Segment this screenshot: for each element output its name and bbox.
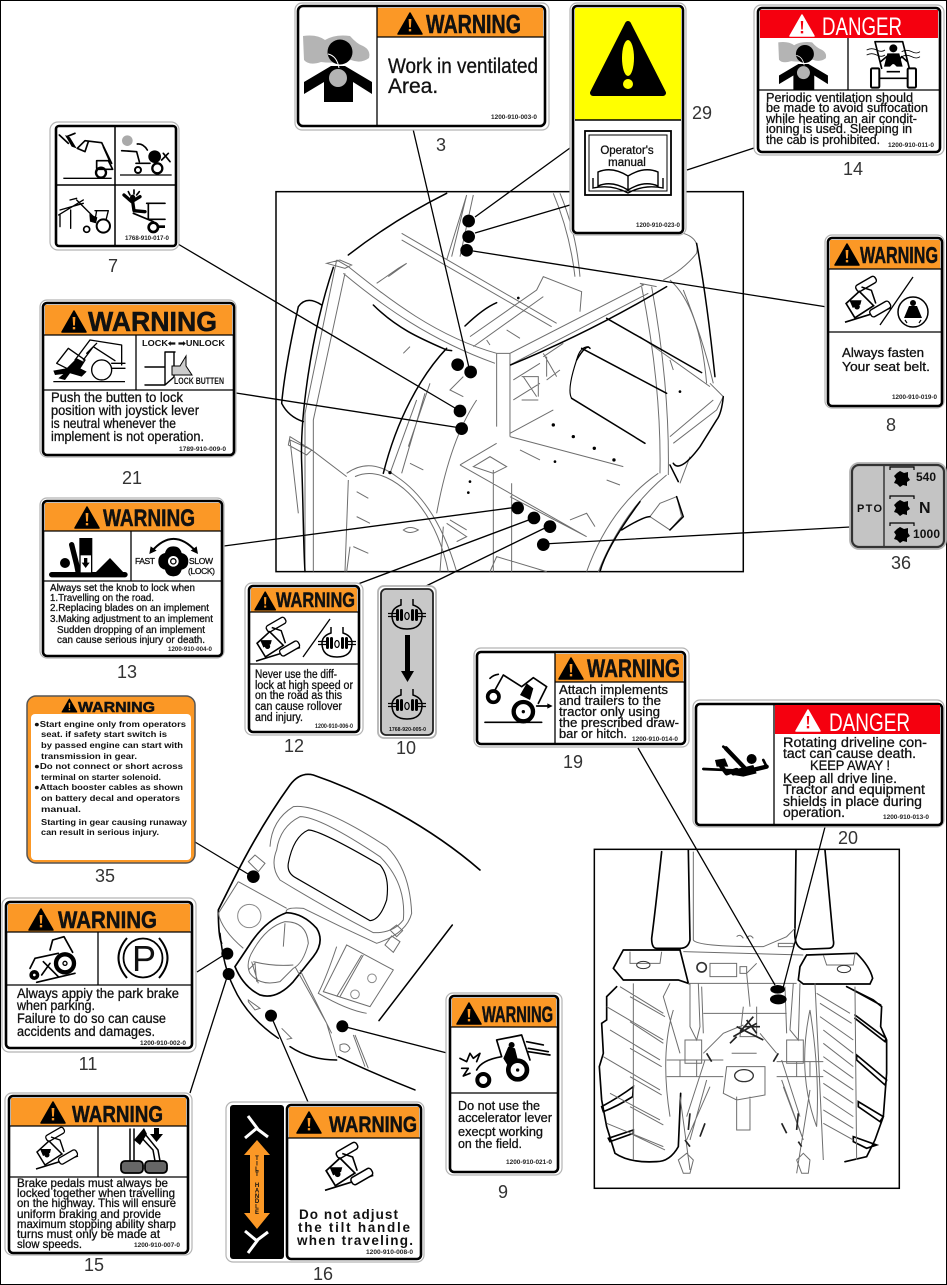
decal 9: accelerator lever	[446, 993, 562, 1175]
part number: 1789-910-009-0	[179, 446, 226, 453]
label 16: 16	[313, 1264, 333, 1284]
message text: the cab is prohibited.	[766, 132, 880, 147]
message text: can result in serious injury.	[41, 827, 159, 837]
decal 13: lock knob	[40, 498, 224, 658]
speed labels	[135, 556, 215, 576]
message text: Starting in gear causing runaway	[41, 817, 187, 827]
icon: tractor tipping	[485, 674, 553, 722]
message text: slow speeds.	[17, 1237, 82, 1251]
icon: person on implement	[124, 190, 165, 232]
tilt handle strip: TILT HANDLE	[254, 1156, 260, 1215]
message text: is neutral whenever the	[51, 415, 176, 431]
message text: Brake pedals must always be	[17, 1176, 168, 1190]
message text: while heating an air condit-	[765, 111, 917, 126]
warning header: WARNING	[482, 1002, 553, 1027]
decal 21: joystick lock	[40, 300, 236, 457]
message text: ioning is used. Sleeping in	[766, 121, 912, 136]
part number: 1200-910-013-0	[883, 814, 929, 821]
icon: tilted tractor	[325, 1141, 374, 1190]
label 3: 3	[436, 135, 446, 155]
message text: 3.Making adjustment to an implement	[50, 613, 213, 625]
message text: 2.Replacing blades on an implement	[50, 602, 209, 614]
icon: rollover	[845, 275, 892, 322]
label 12: 12	[284, 736, 304, 756]
decal 14: danger ventilation	[754, 5, 944, 155]
message text: Tractor and equipment	[783, 782, 925, 797]
message text: Sudden dropping of an implement	[57, 624, 205, 636]
message text: uniform braking and provide	[17, 1207, 161, 1221]
message text: ●Start engine only from operators	[34, 719, 186, 729]
message text: bar or hitch.	[559, 726, 627, 741]
positions: 1000	[913, 527, 940, 541]
part number: 1200-910-007-0	[134, 1242, 180, 1249]
message text: lock at high speed or	[255, 680, 353, 692]
message text: Never use the diff-	[255, 669, 337, 681]
decal 10: diff-lock direction	[378, 586, 436, 738]
message text: on battery decal and operators	[41, 793, 180, 803]
part number: 1200-910-011-0	[888, 142, 934, 149]
decal 8: fasten seat belt	[825, 235, 944, 408]
positions: N	[919, 500, 931, 517]
leader lines	[178, 129, 850, 1102]
icon: no diff-lock	[303, 619, 356, 657]
label 14: 14	[843, 159, 863, 179]
warning header: WARNING	[426, 9, 521, 39]
warning header	[251, 588, 357, 612]
decal 36: PTO selector	[850, 463, 946, 549]
message text: Do not use the	[458, 1098, 540, 1113]
icon: power line contact	[59, 198, 110, 233]
message text: and trailers to the	[559, 693, 661, 708]
warning header	[8, 904, 190, 934]
icon: ventilation	[303, 36, 372, 102]
icon: entangled person	[703, 747, 767, 777]
icon: lock button	[142, 339, 225, 386]
message text: when traveling.	[296, 1233, 413, 1248]
danger header	[760, 10, 938, 41]
part number: 1768-910-017-0	[125, 235, 169, 242]
message text: operation.	[783, 805, 845, 820]
PTO label: PTO	[857, 503, 882, 515]
label 13: 13	[117, 662, 137, 682]
message text: ●Do not connect or short across	[34, 761, 183, 771]
speed labels: (LOCK)	[188, 566, 215, 576]
icon: manual book: Operator's	[600, 145, 654, 157]
message text: Failure to do so can cause	[17, 1011, 166, 1026]
message text: transmission in gear.	[41, 751, 137, 761]
message text: Area.	[388, 75, 438, 98]
speed labels: FAST	[135, 556, 155, 566]
speed labels: SLOW	[189, 556, 213, 566]
part number: 1200-910-006-0	[315, 723, 353, 730]
message text: maximum stopping ability sharp	[17, 1217, 176, 1231]
message text: on the field.	[458, 1136, 522, 1151]
warning header	[830, 240, 940, 269]
icon: diff engaged	[388, 599, 426, 629]
message text: 1.Travelling on the road.	[50, 592, 154, 604]
message text: turns must only be made at	[17, 1227, 161, 1241]
message text: implement is not operation.	[51, 428, 204, 444]
warning header	[377, 8, 543, 39]
decal 11: park brake	[2, 898, 196, 1052]
warning header: WARNING	[58, 907, 157, 934]
label 29: 29	[692, 103, 712, 123]
label 15: 15	[84, 1255, 104, 1275]
warning header: WARNING	[72, 1101, 163, 1127]
decal 3: work in ventilated area	[295, 3, 549, 130]
message text: Keep all drive line.	[783, 771, 897, 786]
part number: 1200-910-008-0	[366, 1249, 413, 1256]
danger header: DANGER	[822, 13, 902, 41]
part number: 1200-910-002-0	[140, 1040, 186, 1047]
message text: Do not adjust	[299, 1207, 398, 1222]
icon: ventilation	[778, 42, 828, 90]
positions	[890, 467, 940, 543]
message text: the tilt handle	[298, 1220, 410, 1235]
message text: and injury.	[255, 712, 303, 724]
icon: manual book: manual	[608, 157, 646, 169]
warning header: WARNING	[78, 699, 155, 716]
label 7: 7	[108, 256, 118, 276]
warning header: WARNING	[103, 505, 195, 532]
decal 16: tilt handle	[226, 1102, 424, 1262]
icon: speeding tractor	[460, 1035, 550, 1086]
message text: Periodic ventilation should	[766, 90, 913, 105]
label 9: 9	[498, 1182, 508, 1202]
positions: 540	[916, 470, 936, 484]
part number: 1200-910-014-0	[632, 736, 678, 743]
warning header	[555, 654, 683, 683]
icon: lock button: LOCK⬅ ➡UNLOCK	[142, 339, 225, 348]
message text: ●Attach booster cables as shown	[34, 782, 183, 792]
message text: locked together when travelling	[17, 1186, 175, 1200]
icon: lock button: LOCK BUTTEN	[174, 376, 224, 386]
danger header: DANGER	[829, 709, 910, 737]
message text: Always fasten	[842, 345, 924, 360]
yellow panel with alert triangle	[575, 8, 681, 120]
message text: tractor only using	[559, 704, 660, 719]
label 35: 35	[95, 866, 115, 886]
part number: 1200-910-003-0	[491, 114, 537, 121]
diagram: instrument dashboard	[218, 774, 480, 1090]
warning header	[452, 998, 556, 1027]
message text: Work in ventilated	[388, 55, 538, 78]
message text: tact can cause death.	[783, 746, 916, 761]
message text: Always set the knob to lock when	[50, 582, 195, 594]
arrow down	[401, 635, 414, 682]
label 19: 19	[563, 752, 583, 772]
part number: 1200-910-021-0	[506, 1159, 552, 1166]
label 8: 8	[886, 415, 896, 435]
message text: terminal on starter solenoid.	[41, 772, 161, 782]
message text: can cause serious injury or death.	[57, 634, 205, 646]
icon: seat belt	[880, 277, 928, 327]
message text: position with joystick lever	[51, 402, 199, 418]
warning header: WARNING	[329, 1112, 417, 1137]
message text: Always appiy the park brake	[17, 986, 179, 1001]
message text: when parking.	[16, 998, 95, 1013]
message text: accelerator lever	[458, 1110, 553, 1125]
warning header: WARNING	[587, 655, 680, 683]
decal 19: attach implements	[474, 648, 689, 747]
warning header: WARNING	[276, 589, 355, 612]
icon: tractor on slope	[36, 1126, 78, 1169]
message text: KEEP AWAY !	[810, 758, 890, 773]
message text: execpt working	[458, 1124, 543, 1139]
danger header	[775, 705, 940, 737]
icon: parking symbol	[118, 938, 168, 979]
label 11: 11	[79, 1054, 97, 1074]
message text: Push the butten to lock	[51, 389, 184, 405]
message text: by passed engine can start with	[41, 740, 183, 750]
warning header	[11, 1098, 186, 1127]
part number: 1768-920-005-0	[389, 727, 426, 733]
tilt handle strip	[230, 1105, 284, 1259]
message text: seat. if safety start switch is	[41, 729, 167, 739]
diagram: rear view of tractor	[594, 849, 899, 1188]
message text: Rotating driveline con-	[783, 735, 927, 750]
message text: be made to avoid suffocation	[766, 100, 928, 115]
label 10: 10	[396, 738, 416, 758]
label 36: 36	[891, 553, 911, 573]
icon: speed knob	[149, 539, 198, 576]
label 21: 21	[122, 468, 142, 488]
message text: shields in place during	[783, 794, 922, 809]
icon: parking symbol: P	[132, 938, 156, 979]
icon: loader and person	[53, 340, 125, 382]
decal 35: starter warning	[27, 696, 195, 863]
diagram: cab frame with decal positions	[276, 192, 743, 572]
icon: locked pedals	[121, 1128, 167, 1173]
part number: 1200-910-004-0	[168, 646, 212, 653]
icon: tractor runover	[120, 135, 172, 175]
icon: diff disengaged	[388, 689, 426, 719]
icon: person crushed	[52, 539, 125, 575]
decal 20: rotating driveline danger	[693, 700, 944, 827]
icon: tractor cab heat	[867, 42, 920, 88]
message text: Your seat belt.	[842, 359, 930, 374]
icon: rollover tractor	[256, 616, 301, 661]
icon: manual book	[585, 131, 671, 195]
message text: Attach implements	[559, 682, 669, 697]
part number: 1200-910-023-0	[636, 222, 680, 229]
message text: can cause rollover	[255, 701, 342, 713]
message text: on the highway. This will ensure	[17, 1196, 176, 1210]
message text: on the road as this	[255, 690, 342, 702]
decal 29: operator's manual	[570, 3, 686, 235]
message text: manual.	[41, 804, 81, 814]
decal 7: pictogram grid	[50, 122, 179, 250]
icon: loader crushing	[59, 133, 113, 178]
label 20: 20	[838, 828, 858, 848]
warning header	[45, 503, 220, 532]
warning header	[289, 1107, 419, 1138]
part number: 1200-910-019-0	[892, 394, 937, 401]
message text: accidents and damages.	[17, 1024, 155, 1039]
decal 12: diff-lock warning	[245, 583, 363, 735]
message text: the prescribed draw-	[559, 715, 679, 730]
icon: rolling tractor	[29, 937, 75, 982]
warning header: WARNING	[88, 306, 217, 337]
decal 15: brake pedals	[5, 1093, 192, 1255]
pictograms	[59, 133, 172, 233]
